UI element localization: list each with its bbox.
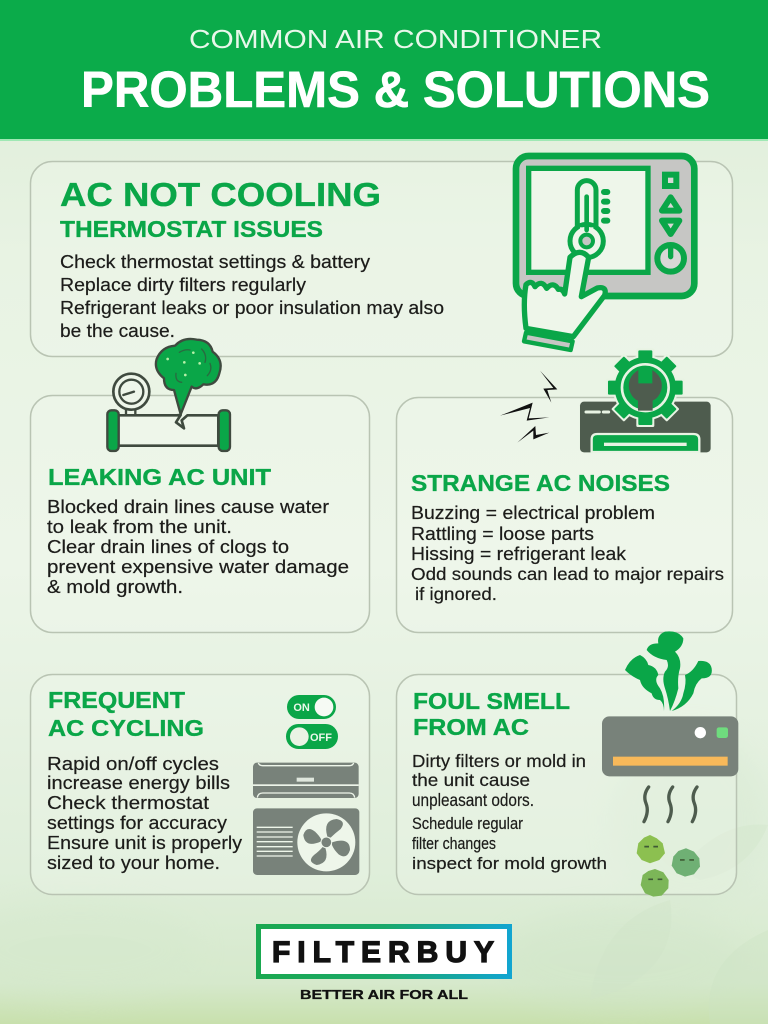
- icon: on switch: [287, 695, 336, 719]
- icon: noise bolts: [500, 371, 557, 443]
- text block: odor causes: filter changes: [412, 835, 496, 853]
- title line: common air conditioner: COMMON AIR CONDITIONER: [189, 24, 602, 54]
- text block: noise meanings: Odd sounds can lead to major repairs: [411, 564, 724, 584]
- heading: frequent AC cycling: [48, 687, 204, 741]
- icon: indoor AC unit: [253, 763, 359, 798]
- text block: leak causes: [47, 496, 349, 597]
- heading: strange AC noises: STRANGE AC NOISES: [411, 470, 670, 496]
- text block: thermostat tips: Replace dirty filters regularly: [60, 275, 306, 295]
- icon: on switch: ON: [293, 702, 310, 714]
- header banner: [0, 0, 768, 141]
- text block: odor causes: Dirty filters or mold in: [412, 751, 586, 771]
- panel: strange AC noises: [396, 398, 732, 632]
- heading: leaking AC unit: LEAKING AC UNIT: [48, 464, 271, 490]
- icon: off switch: [286, 724, 338, 749]
- icon: gear with pale outline: [606, 348, 685, 427]
- icon: green fumes: [625, 631, 712, 711]
- text block: leak causes: Blocked drain lines cause water: [47, 496, 329, 517]
- text block: noise meanings: if ignored.: [415, 584, 497, 604]
- text block: leak causes: to leak from the unit.: [47, 516, 232, 537]
- icon: mold spores: [637, 835, 700, 897]
- icon: on off switches and AC units: [253, 695, 359, 875]
- title line: problems and solutions: PROBLEMS & SOLUTIONS: [81, 61, 710, 118]
- panel: foul smell from AC: [396, 674, 736, 894]
- heading: foul smell from AC: FROM AC: [413, 714, 529, 740]
- text block: cycling causes: Rapid on/off cycles: [47, 753, 219, 774]
- text block: noise meanings: Hissing = refrigerant leak: [411, 543, 627, 564]
- icon: leaking pipe with gauge: [107, 339, 230, 451]
- heading: foul smell from AC: FOUL SMELL: [413, 688, 570, 714]
- logo wordmark: FILTERBUY: [272, 936, 494, 969]
- heading: frequent AC cycling: FREQUENT: [48, 687, 185, 713]
- text block: cycling causes: Ensure unit is properly: [47, 832, 243, 853]
- heading: foul smell from AC: [413, 688, 570, 740]
- icon: smelly AC unit with mold: [602, 631, 738, 897]
- text block: noise meanings: Rattling = loose parts: [411, 523, 594, 544]
- text block: noise meanings: [411, 502, 724, 604]
- text block: thermostat tips: Check thermostat settings & battery: [60, 252, 370, 272]
- text block: leak causes: prevent expensive water damage: [47, 556, 349, 577]
- subheading: thermostat issues: THERMOSTAT ISSUES: [60, 216, 323, 242]
- heading: AC not cooling: AC NOT COOLING: [60, 176, 381, 213]
- text block: odor causes: unpleasant odors.: [412, 790, 534, 810]
- text block: odor causes: inspect for mold growth: [412, 855, 607, 873]
- text block: odor causes: [412, 751, 607, 873]
- icon: odor waves: [644, 787, 697, 822]
- tagline: BETTER AIR FOR ALL: [300, 987, 468, 1002]
- text block: thermostat tips: be the cause.: [60, 321, 175, 341]
- icon: AC unit with wrench gear and noise bolts: [500, 348, 711, 452]
- icon: thermostat with pointing hand: [516, 156, 694, 350]
- text block: cycling causes: Check thermostat: [47, 792, 209, 813]
- icon: outdoor AC unit with fan: [253, 808, 359, 875]
- text block: leak causes: & mold growth.: [47, 576, 183, 597]
- text block: odor causes: the unit cause: [412, 770, 530, 790]
- heading: frequent AC cycling: AC CYCLING: [48, 715, 204, 741]
- panel: AC not cooling: [30, 162, 732, 356]
- panel: frequent AC cycling: [30, 674, 370, 894]
- text block: cycling causes: settings for accuracy: [47, 812, 228, 833]
- text block: odor causes: Schedule regular: [412, 815, 523, 833]
- panel: leaking AC unit: [30, 396, 370, 632]
- text block: thermostat tips: Refrigerant leaks or poor insulation may also: [60, 298, 444, 318]
- text block: cycling causes: sized to your home.: [47, 852, 220, 873]
- text block: noise meanings: Buzzing = electrical problem: [411, 502, 655, 523]
- logo: Filterbuy: [258, 926, 510, 1002]
- text block: leak causes: Clear drain lines of clogs to: [47, 536, 289, 557]
- text block: cycling causes: increase energy bills: [47, 772, 230, 793]
- icon: AC body: [602, 716, 738, 776]
- icon: off switch: OFF: [310, 732, 332, 744]
- text block: thermostat tips: [60, 252, 444, 341]
- text block: cycling causes: [47, 753, 243, 873]
